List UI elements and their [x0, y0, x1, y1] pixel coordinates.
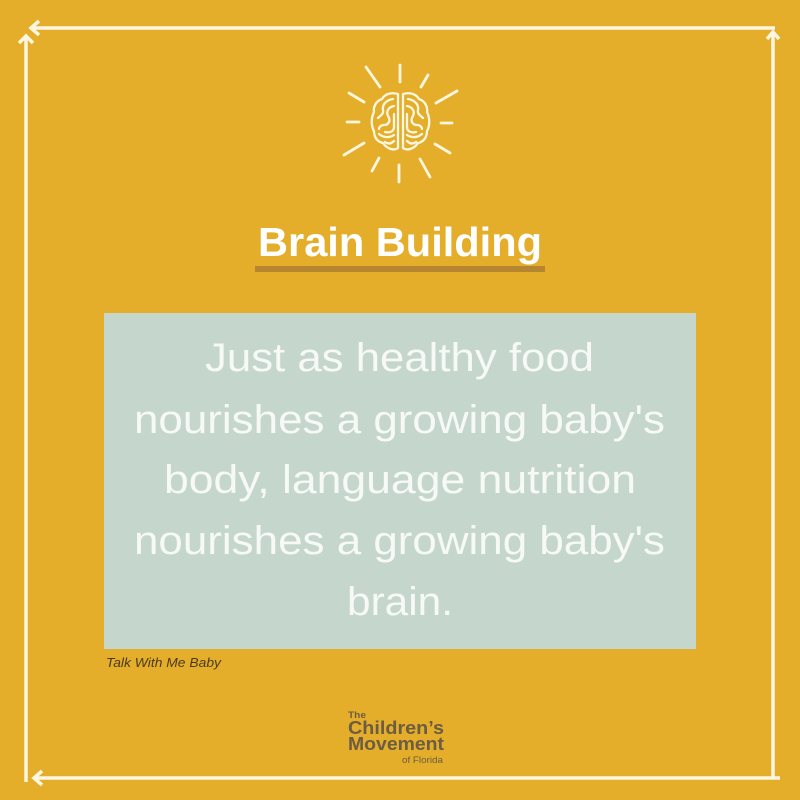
source credit: Talk With Me Baby	[106, 655, 223, 670]
logo: of Florida	[402, 755, 443, 765]
quote text: nourishes a growing baby's	[134, 398, 665, 442]
icon: brain	[372, 93, 429, 149]
logo: Movement	[348, 734, 444, 754]
heading underline	[255, 266, 545, 272]
quote text: Just as healthy food	[205, 336, 594, 380]
heading: Brain Building	[258, 219, 542, 265]
quote text: nourishes a growing baby's	[134, 519, 665, 563]
logo	[348, 710, 444, 765]
panel background	[104, 313, 696, 649]
arrow: right	[767, 32, 779, 778]
quote text: body, language nutrition	[164, 458, 636, 502]
quote text: brain.	[347, 580, 453, 624]
arrow: top	[31, 21, 775, 35]
icon: brain with rays	[344, 65, 457, 182]
logo: The	[348, 710, 366, 720]
arrow: bottom	[34, 771, 780, 785]
panel: quote	[104, 313, 696, 649]
quote text	[134, 336, 665, 624]
logo: Children’s	[348, 718, 444, 738]
arrow: left	[19, 36, 33, 782]
icon: rays	[344, 65, 457, 182]
